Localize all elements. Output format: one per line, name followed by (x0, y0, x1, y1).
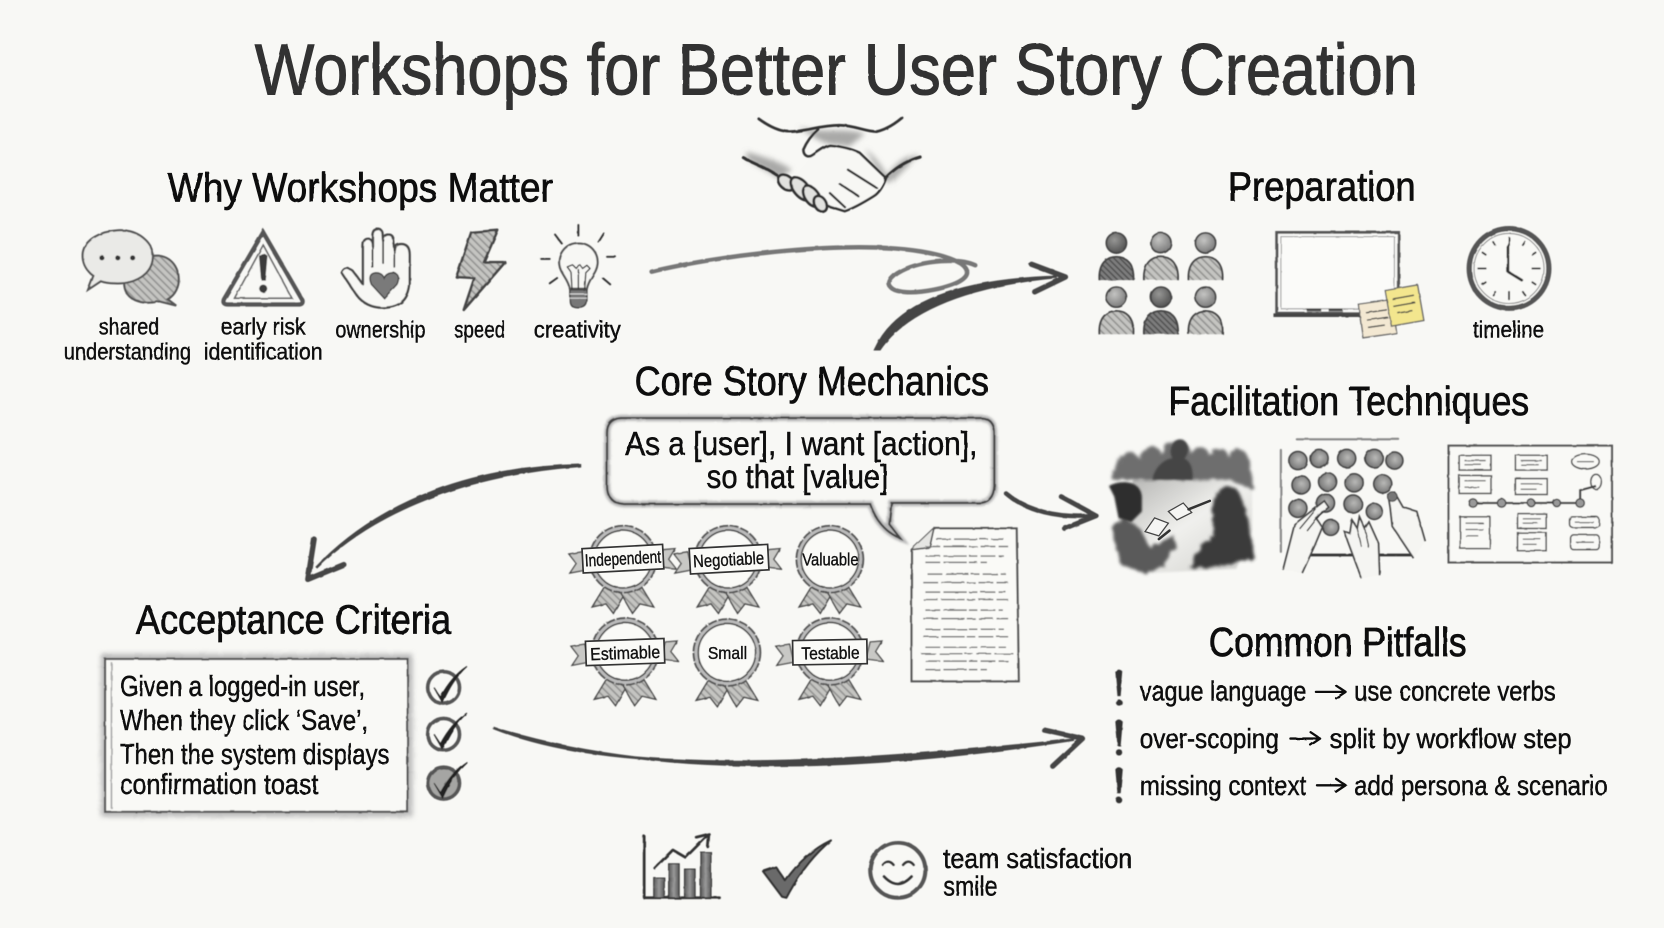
text: given when then: Given a logged-in user, (120, 671, 365, 703)
box: acceptance criteria (105, 658, 409, 813)
label: creativity: creativity (534, 316, 621, 342)
text: story template (625, 425, 977, 495)
icon: smiley face (870, 843, 925, 898)
icon: warning triangle (223, 232, 303, 305)
badge: negotiable (674, 526, 781, 613)
badge: estimable: Estimable (590, 642, 660, 664)
arrow: why workshops to preparation (652, 247, 1065, 349)
label: early risk identification (204, 313, 323, 365)
text: given when then: confirmation toast (120, 769, 318, 801)
pitfall: vague language: vague language (1140, 675, 1306, 706)
icon: light bulb (541, 225, 616, 308)
badge: small (694, 619, 760, 707)
section: why workshops matter (64, 165, 621, 365)
label: team satisfaction smile: smile (943, 871, 998, 902)
icon: rising bar chart (644, 834, 720, 898)
arrow: core mechanics to acceptance criteria (308, 465, 579, 579)
heading: common pitfalls: Common Pitfalls (1209, 619, 1467, 665)
illustration: dot voting on board (1281, 439, 1425, 578)
label: early risk identification: early risk (221, 313, 306, 339)
title: Workshops for Better User Story Creation (255, 30, 1418, 110)
pitfall: over-scoping: over-scoping (1140, 723, 1279, 754)
section: common pitfalls (1115, 619, 1608, 803)
pitfall: vague language: use concrete verbs (1354, 675, 1556, 706)
pitfall: vague language (1140, 675, 1556, 706)
pitfall: missing context (1140, 770, 1608, 801)
section: preparation (1099, 164, 1549, 342)
section: acceptance criteria (105, 597, 467, 813)
illustration: people writing on cards (1109, 439, 1254, 573)
section: facilitation techniques (1109, 378, 1612, 578)
heading: core story mechanics: Core Story Mechanics (635, 358, 989, 404)
label: early risk identification: identification (204, 339, 323, 365)
heading: facilitation techniques: Facilitation Techniques (1168, 378, 1529, 424)
heading: preparation: Preparation (1228, 164, 1416, 210)
label: team satisfaction smile (943, 843, 1132, 902)
icon: big check mark (763, 840, 831, 898)
text: story template: so that [value] (707, 458, 888, 495)
label: timeline: timeline (1473, 316, 1544, 342)
arrow: core mechanics to facilitation (1006, 493, 1096, 528)
section: core story mechanics (569, 358, 1019, 707)
icon: hand with heart (342, 229, 410, 308)
icon: whiteboard with sticky notes (1273, 232, 1424, 338)
pitfall: missing context: missing context (1140, 770, 1307, 801)
pitfall: missing context: add persona & scenario (1354, 770, 1608, 801)
icon: handshake (744, 118, 920, 214)
icon: exclamation marks (1115, 670, 1123, 803)
badge: independent (569, 526, 676, 613)
heading: why workshops matter: Why Workshops Matter (168, 165, 553, 211)
icon: speech bubbles (83, 230, 179, 306)
icon: lightning bolt (456, 230, 505, 310)
label: shared understanding (64, 313, 191, 365)
label: speed: speed (454, 316, 505, 342)
icon: check circles (428, 666, 467, 799)
text: given when then: When they click ‘Save’, (120, 705, 368, 737)
arrow: acceptance criteria to pitfalls (493, 728, 1082, 766)
speech bubble: user story template (607, 418, 994, 538)
heading: acceptance criteria: Acceptance Criteria (136, 597, 452, 643)
section: outcomes (644, 834, 1132, 902)
text: given when then (120, 671, 389, 801)
badge: valuable: Valuable (802, 550, 859, 570)
badge: negotiable: Negotiable (693, 548, 765, 571)
icon: document (912, 528, 1019, 681)
label: shared understanding: understanding (64, 339, 191, 365)
illustration: process flow board (1449, 446, 1612, 562)
badge: valuable (796, 526, 863, 613)
text: story template: As a [user], I want [action], (625, 425, 977, 462)
label: ownership: ownership (335, 316, 426, 342)
pitfall: over-scoping (1140, 723, 1572, 754)
badge: testable: Testable (801, 642, 860, 663)
icon: clock (1469, 229, 1549, 308)
label: shared understanding: shared (99, 313, 159, 339)
icon: group of six people (1099, 233, 1223, 334)
badge: small: Small (708, 643, 747, 663)
text: given when then: Then the system displays (120, 739, 389, 771)
pitfall: over-scoping: split by workflow step (1330, 723, 1572, 754)
badge: estimable (571, 618, 678, 706)
badge: independent: Independent (584, 547, 662, 571)
label: team satisfaction smile: team satisfaction (943, 843, 1132, 874)
badge: testable (776, 618, 883, 706)
